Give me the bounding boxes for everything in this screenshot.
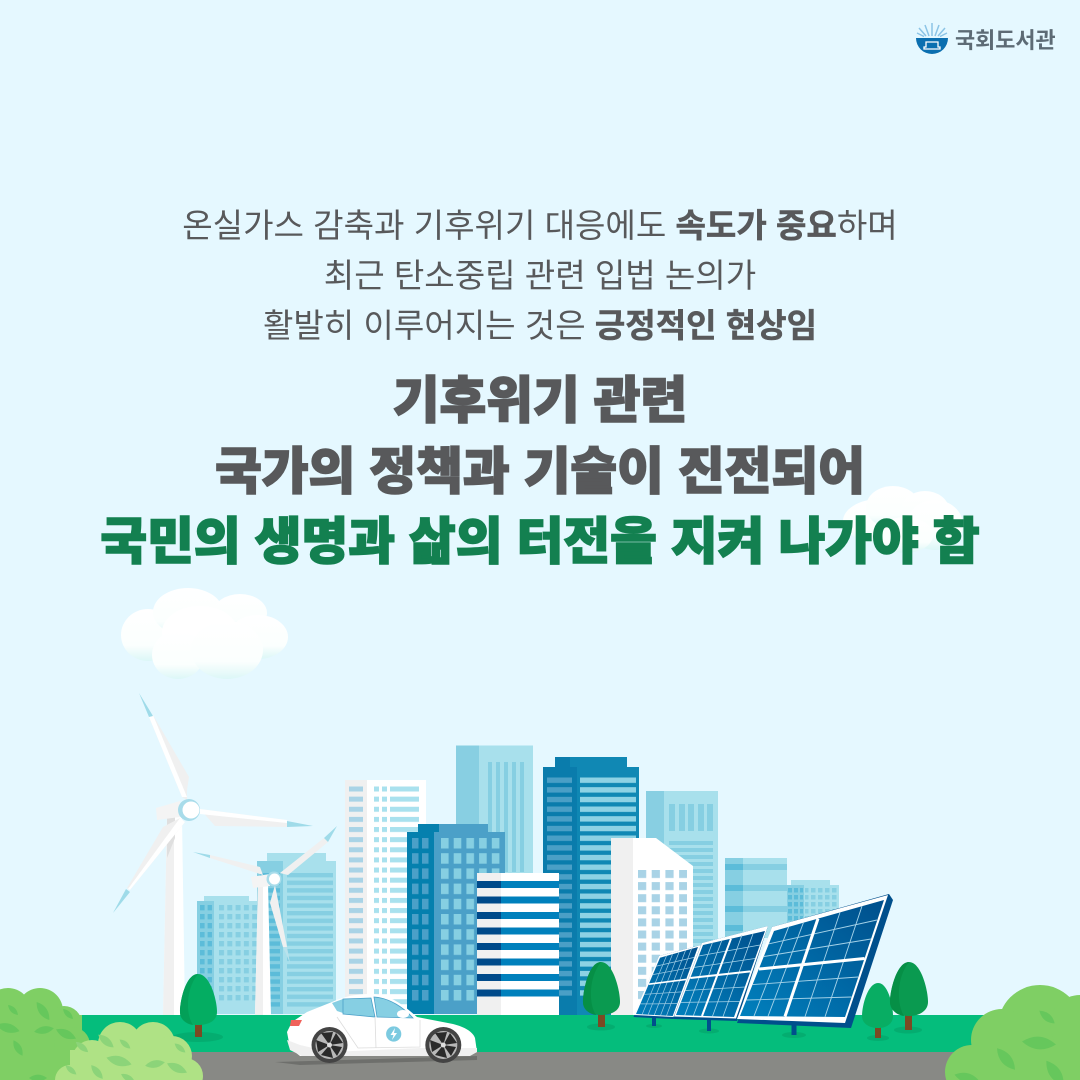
building: light blue left block [197, 896, 259, 1014]
panel medium [673, 926, 768, 1021]
tree right large [890, 962, 928, 1034]
bush left dark [0, 988, 90, 1080]
wind turbine: small [193, 826, 337, 1015]
headline: 국가의 정책과 기술이 진전되어 [215, 443, 865, 500]
logo emblem [916, 23, 948, 54]
building: mid blue block [407, 824, 505, 1014]
building: blue tower behind small turbine [257, 853, 336, 1014]
tree left [173, 974, 223, 1042]
building: white tower with blue windows [345, 780, 426, 1014]
building: striped low block [725, 858, 787, 938]
wheel front [425, 1027, 461, 1063]
building: white block with blue stripes [477, 873, 559, 1015]
road [0, 1052, 1080, 1080]
cloud behind headline [843, 486, 963, 553]
bush left light [55, 1022, 203, 1080]
logo wordmark: 국회도서관 [955, 28, 1056, 53]
body text: 활발히 이루어지는 것은 긍정적인 현상임 [263, 308, 817, 345]
solar panels [634, 894, 893, 1038]
building: white angled tower [611, 838, 693, 1015]
wind turbine: large [113, 693, 313, 1015]
building: light blue tower back center [456, 746, 533, 876]
tree center [583, 962, 620, 1030]
panel small [634, 945, 701, 1019]
building: pale blue tower right [646, 791, 718, 991]
body text [182, 208, 898, 345]
body text: 최근 탄소중립 관련 입법 논의가 [324, 258, 756, 295]
bush right [945, 985, 1080, 1080]
headline: 국민의 생명과 삶의 터전을 지켜 나가야 함 [100, 513, 980, 570]
ground [0, 1015, 1080, 1052]
body text: 온실가스 감축과 기후위기 대응에도 속도가 중요하며 [182, 208, 898, 245]
electric car [275, 994, 477, 1065]
headline [100, 372, 980, 570]
panel large [737, 894, 893, 1028]
wheel rear [312, 1027, 348, 1063]
building: small block far right [787, 880, 839, 925]
headline: 기후위기 관련 [393, 372, 687, 429]
building: dark blue tower [543, 757, 639, 1015]
cloud upper left [121, 588, 288, 679]
tree right small [862, 983, 893, 1041]
